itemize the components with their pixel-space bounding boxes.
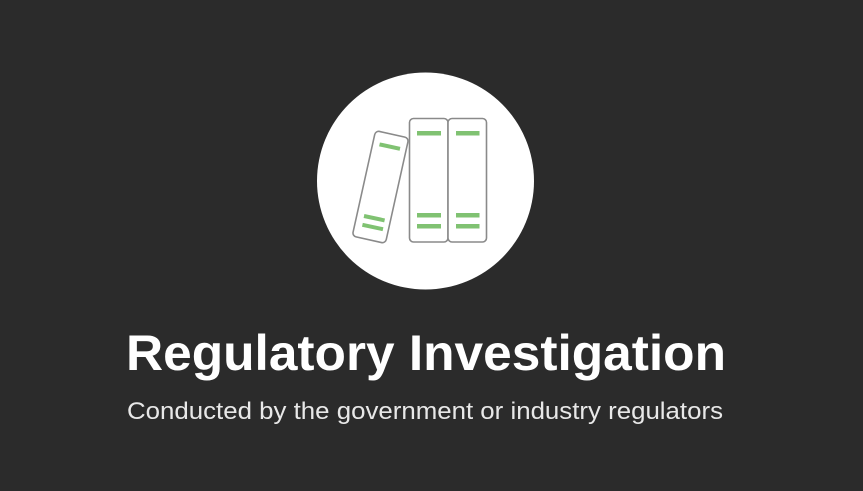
icon: right book — [448, 118, 486, 242]
icon: white circle with books — [317, 72, 534, 290]
icon: tilted book — [352, 131, 409, 243]
icon: middle book — [410, 118, 448, 242]
subtitle: Conducted by the government or industry regulators — [127, 398, 723, 425]
title: Regulatory Investigation — [126, 325, 726, 381]
